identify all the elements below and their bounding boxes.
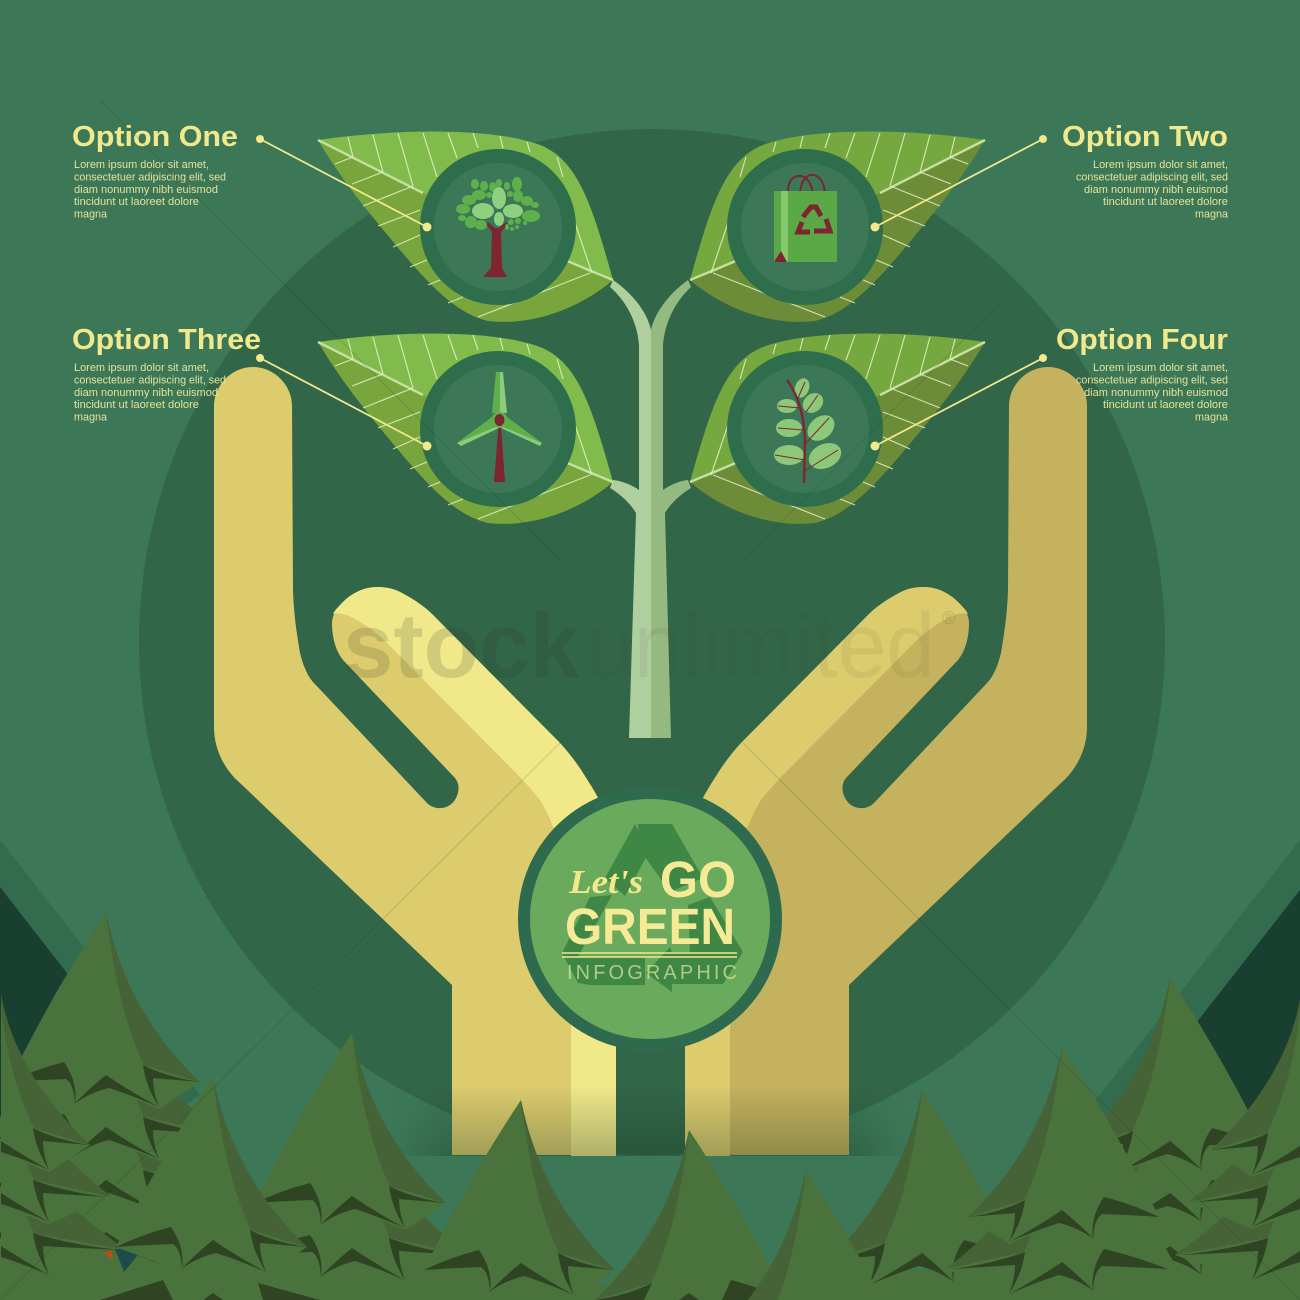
description: option four: diam nonummy nibh euismod (1084, 387, 1228, 399)
description: option two: tincidunt ut laoreet dolore (1103, 196, 1228, 208)
label: option one (72, 121, 238, 220)
large background circle (139, 129, 1165, 1155)
icon circle: wind turbine (420, 351, 576, 507)
pine tree (946, 1047, 1178, 1296)
description: option four (1076, 362, 1229, 424)
plant stem (610, 280, 691, 738)
description: option one: Lorem ipsum dolor sit amet, (74, 159, 209, 171)
pine tree (1, 995, 126, 1277)
label: option two: Option Two (1062, 121, 1228, 153)
label: option four: Option Four (1056, 324, 1228, 356)
ground (0, 1156, 1300, 1300)
pine tree (595, 1130, 786, 1300)
icon: recycled bag (774, 175, 837, 262)
pine tree (1175, 1000, 1300, 1282)
left hand (214, 367, 616, 1156)
forest floor (0, 1200, 1300, 1300)
description: option two (1076, 159, 1229, 220)
label: option four (1056, 324, 1229, 424)
watermark (343, 595, 955, 697)
leaf: option four (690, 334, 985, 524)
lower branch shadows (100, 1280, 320, 1300)
description: option three: consectetuer adipiscing elit, sed (74, 374, 226, 386)
label: option two (1062, 121, 1229, 220)
watermark: ® (942, 608, 955, 628)
description: option three: tincidunt ut laoreet dolore (74, 399, 199, 411)
icon circle: tree (420, 149, 576, 305)
leaf: option three (318, 334, 613, 524)
description: option one: diam nonummy nibh euismod (74, 184, 218, 196)
description: option one: tincidunt ut laoreet dolore (74, 196, 199, 208)
description: option one: magna (74, 208, 108, 220)
description: option four: consectetuer adipiscing elit, sed (1076, 374, 1228, 386)
pine tree (828, 1090, 1019, 1287)
description: option three: magna (74, 412, 108, 424)
label: option one: Option One (72, 121, 238, 153)
label: option three: Option Three (72, 324, 261, 356)
recycle symbol (562, 824, 743, 992)
leader lines (256, 135, 1047, 450)
description: option four: tincidunt ut laoreet dolore (1103, 399, 1228, 411)
pine tree (1054, 978, 1286, 1280)
description: option one (74, 159, 226, 220)
badge: let's go green (518, 787, 782, 1051)
description: option two: consectetuer adipiscing elit, sed (1076, 172, 1228, 184)
text: green: GREEN (565, 898, 735, 955)
icon: wind turbine (457, 372, 542, 482)
watermark: stock (343, 595, 581, 697)
description: option two: Lorem ipsum dolor sit amet, (1093, 159, 1228, 171)
description: option three: diam nonummy nibh euismod (74, 387, 218, 399)
description: option three: Lorem ipsum dolor sit amet, (74, 362, 209, 374)
watermark: unlimited (585, 595, 935, 697)
bottom shadow (412, 1093, 888, 1156)
description: option one: consectetuer adipiscing elit, sed (74, 172, 226, 184)
text: go: GO (660, 851, 736, 908)
icon circle: shopping bag (727, 149, 883, 305)
pine tree (116, 1077, 307, 1274)
pine tree (424, 1100, 615, 1297)
leaf: option one (318, 132, 613, 322)
description: option two: diam nonummy nibh euismod (1084, 184, 1228, 196)
pine trees (0, 912, 1300, 1300)
description: option four: magna (1195, 412, 1229, 424)
label: option three (72, 324, 261, 424)
icon: tree (456, 177, 540, 277)
pine tree (0, 912, 271, 1266)
leaf: option two (690, 132, 985, 322)
icon: leafy branch (774, 376, 845, 483)
pine tree (236, 1033, 468, 1282)
description: option four: Lorem ipsum dolor sit amet, (1093, 362, 1228, 374)
description: option two: magna (1195, 208, 1229, 220)
divider lines (562, 953, 737, 957)
icon circle: branch (727, 351, 883, 507)
trunk gap (103, 1249, 142, 1272)
text: infographic: INFOGRAPHIC (567, 962, 737, 984)
text: let's: Let's (568, 864, 643, 901)
right hand (685, 367, 1087, 1156)
background mountains (0, 840, 1300, 1230)
pine tree (748, 1170, 883, 1300)
description: option three (74, 362, 226, 424)
